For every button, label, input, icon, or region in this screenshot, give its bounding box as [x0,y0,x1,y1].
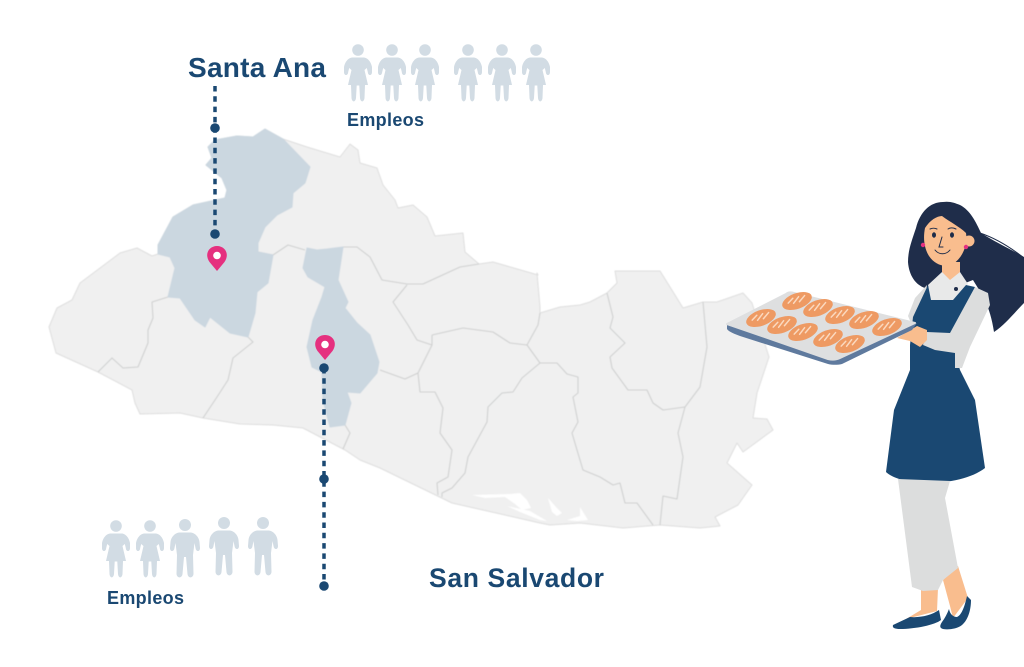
label: Empleos bottom: Empleos [107,588,184,608]
label: Empleos top: Empleos [347,110,424,130]
facial features [930,228,956,254]
illustration: baker woman with tray [727,202,1024,629]
hair [908,202,1024,332]
bread loaves [744,288,904,357]
icons: San Salvador jobs [102,517,278,577]
skirt apron [886,285,985,483]
pin: San Salvador [315,335,335,360]
trousers [898,479,958,591]
map of El Salvador [49,129,773,528]
collar [928,272,968,301]
hand [897,326,927,347]
Gulf lagoon [472,493,588,521]
icons: Santa Ana jobs [344,44,550,101]
tray [727,288,917,365]
left sleeve [908,285,927,330]
ear [964,236,974,246]
heading: Santa Ana: Santa Ana [188,52,326,83]
San Salvador connector [319,363,329,591]
face [924,216,966,266]
map base silhouette [49,129,773,528]
neck [942,262,960,289]
right sleeve [923,287,990,368]
heading: San Salvador: San Salvador [429,563,604,593]
pin: Santa Ana [207,246,227,271]
department borders [98,245,707,525]
earrings [964,245,968,249]
region: Santa Ana [158,129,310,337]
region: San Salvador [303,247,379,427]
shoes [893,596,971,629]
legs [906,566,968,619]
hair strand [980,233,1024,258]
Santa Ana connector [210,86,220,239]
